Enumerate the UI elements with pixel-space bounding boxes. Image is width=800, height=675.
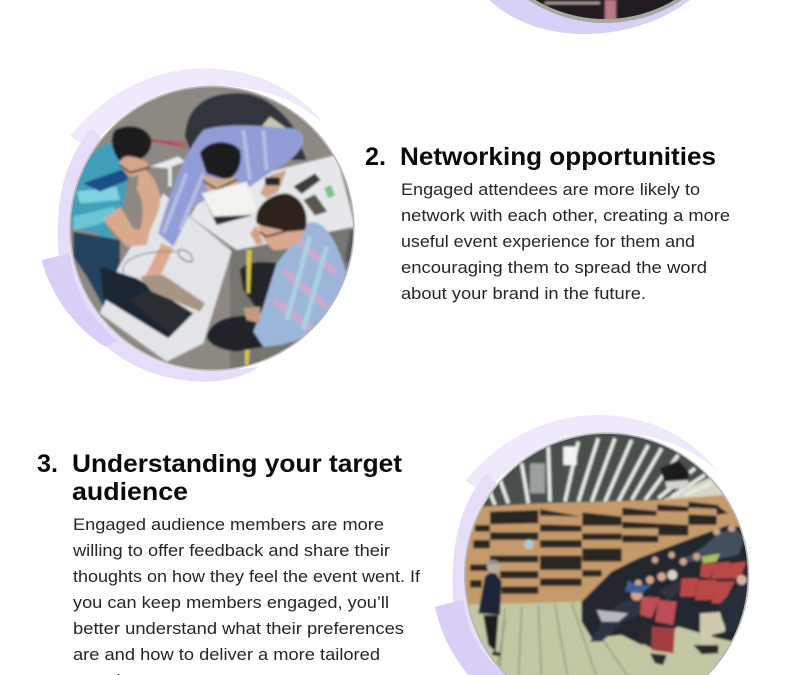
accent: darker lavender lower-left band	[42, 253, 117, 347]
text block: networking body	[401, 180, 730, 303]
wall	[458, 493, 745, 605]
accent: light lavender top arc	[465, 415, 718, 493]
seated man right	[700, 612, 725, 645]
photo circle: speaker in auditorium	[435, 415, 758, 675]
text block: understanding body: thoughts on how they feel the event went. If	[73, 567, 420, 586]
tables	[190, 155, 355, 250]
heading: Understanding your target audience: Understanding your target	[72, 450, 403, 478]
man left: striped shirt	[70, 143, 128, 247]
text block: understanding body: better understand what their preferences	[73, 619, 404, 638]
text block: understanding body: Engaged audience members are more	[73, 515, 384, 534]
man centre: blue check shirt	[158, 125, 304, 247]
text block: understanding body: willing to offer feedback and share their	[72, 541, 390, 560]
chair	[185, 93, 307, 160]
number 3: 3.	[37, 450, 58, 478]
heading: Networking opportunities: Networking opportunities	[400, 143, 716, 171]
text block: networking body: about your brand in the future.	[401, 284, 646, 303]
text block: networking body: encouraging them to spread the word	[401, 258, 707, 277]
speaker	[478, 570, 502, 615]
accent: light lavender top arc	[70, 68, 323, 148]
papers on table	[200, 180, 256, 217]
text block: understanding body: you can keep members engaged, you’ll	[73, 593, 389, 612]
floor	[458, 602, 748, 675]
text block: understanding body	[72, 515, 420, 675]
heading: Understanding your target audience: audience	[72, 478, 188, 506]
man right: pastel plaid shirt	[239, 261, 278, 313]
accent: lavender left and bottom arc	[58, 128, 260, 382]
photo circle: networking team around a table	[42, 68, 363, 382]
text block: understanding body: are and how to deliver a more tailored	[73, 645, 380, 664]
accent: lavender left arc	[453, 473, 532, 675]
text block: networking body: network with each other, creating a more	[401, 206, 730, 225]
number 2: 2.	[365, 143, 386, 171]
ceiling	[482, 434, 710, 508]
text block: networking body: Engaged attendees are more likely to	[401, 180, 700, 199]
photo circle: top cropped image	[489, 0, 690, 34]
phones	[293, 173, 321, 194]
heading: Understanding your target audience	[72, 450, 403, 506]
text block: networking body: useful event experience for them and	[401, 232, 695, 251]
laptop	[100, 267, 193, 338]
accent: darker lavender lower-left band	[435, 600, 505, 675]
audience	[582, 525, 748, 645]
